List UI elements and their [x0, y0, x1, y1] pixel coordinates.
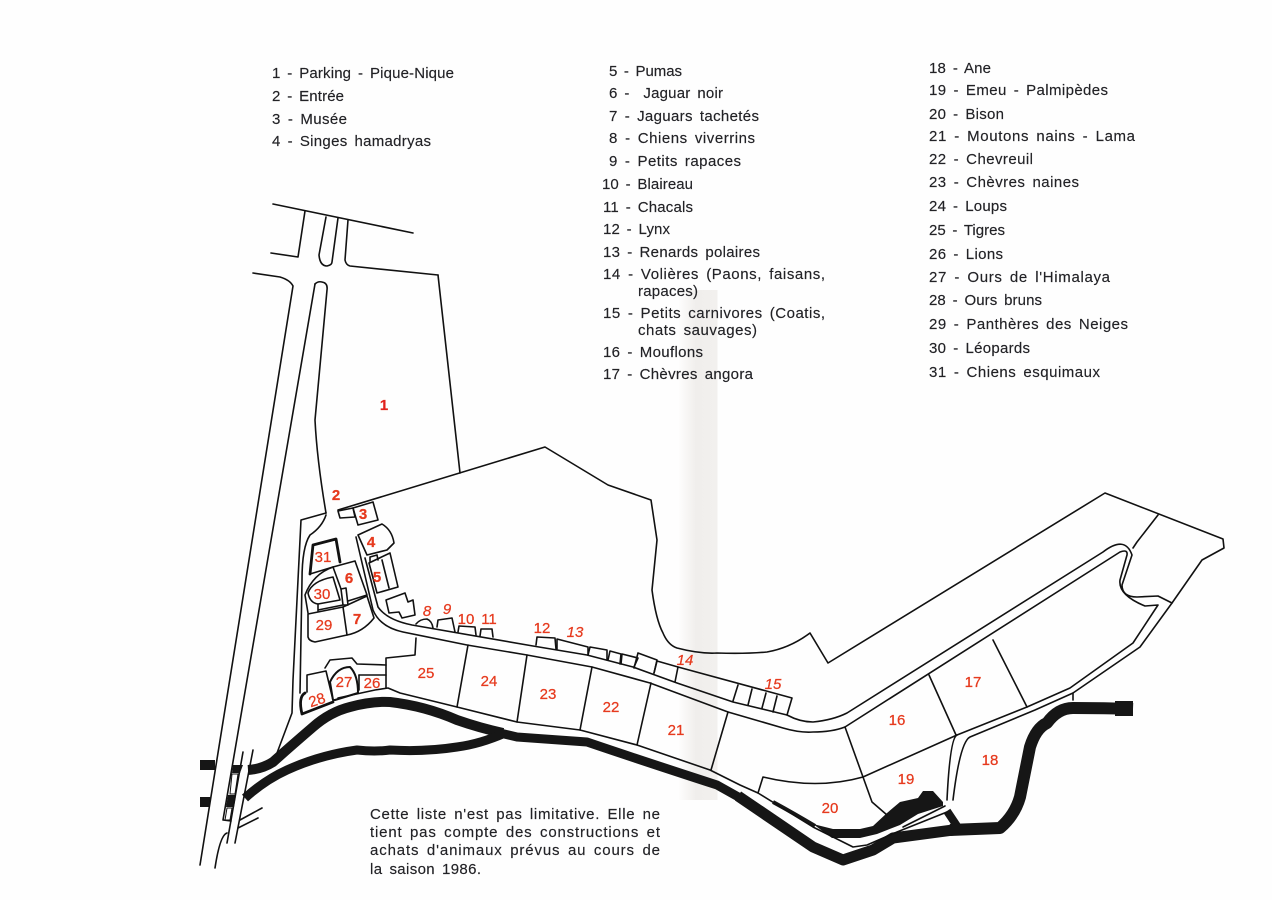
label 24: 24	[481, 673, 497, 690]
legend column: items 1 to 4	[272, 65, 454, 150]
note text block: la saison 1986.	[370, 861, 481, 878]
label 4: 4	[367, 534, 376, 551]
map number labels	[307, 397, 998, 817]
label 29: 29	[316, 617, 332, 634]
legend item 13: 13 - Renards polaires	[603, 244, 760, 261]
label 27: 27	[336, 674, 352, 691]
enclosure dividers	[386, 638, 1027, 815]
legend item 14: rapaces)	[638, 283, 698, 300]
legend item 26: 26 - Lions	[929, 246, 1003, 263]
legend column: items 18 to 31	[929, 60, 1136, 381]
label 20: 20	[822, 800, 838, 817]
label 25: 25	[418, 665, 434, 682]
legend item 14	[603, 266, 825, 300]
legend item 28: 28 - Ours bruns	[929, 292, 1042, 309]
legend item 3: 3 - Musée	[272, 111, 347, 128]
label 2: 2	[332, 487, 340, 504]
label 30: 30	[314, 586, 330, 603]
legend item 8: 8 - Chiens viverrins	[609, 130, 755, 147]
legend item 14: 14 - Volières (Paons, faisans,	[603, 266, 825, 283]
legend item 16: 16 - Mouflons	[603, 344, 703, 361]
map: site plan	[200, 204, 1224, 868]
legend item 23: 23 - Chèvres naines	[929, 174, 1079, 191]
buildings near the entrance	[338, 502, 415, 618]
legend item 9: 9 - Petits rapaces	[609, 153, 741, 170]
label 3: 3	[359, 506, 367, 523]
bear and lion enclosures 26, 27, 28	[301, 658, 386, 714]
legend item 12: 12 - Lynx	[603, 221, 670, 238]
legend column: items 5 to 17	[602, 63, 825, 383]
legend item 31: 31 - Chiens esquimaux	[929, 364, 1100, 381]
legend item 1: 1 - Parking - Pique-Nique	[272, 65, 454, 82]
label 6: 6	[345, 570, 353, 587]
label 9: 9	[443, 601, 452, 618]
label 14: 14	[677, 652, 693, 669]
legend item 4: 4 - Singes hamadryas	[272, 133, 431, 150]
label 26: 26	[364, 675, 380, 692]
note text block: achats d'animaux prévus au cours de	[370, 842, 660, 859]
legend item 2: 2 - Entrée	[272, 88, 344, 105]
label 18: 18	[982, 752, 998, 769]
label 7: 7	[353, 611, 361, 628]
label 28: 28	[307, 690, 328, 711]
legend item 6: 6 - Jaguar noir	[609, 85, 723, 102]
label 13: 13	[567, 624, 584, 641]
legend item 15	[603, 305, 825, 339]
legend item 17: 17 - Chèvres angora	[603, 366, 754, 383]
legend item 22: 22 - Chevreuil	[929, 151, 1033, 168]
label 10: 10	[458, 611, 474, 628]
small cages 8 to 15 along the road	[416, 618, 792, 715]
legend item 10: 10 - Blaireau	[602, 176, 693, 193]
label 5: 5	[373, 569, 381, 586]
label 8: 8	[423, 603, 432, 620]
label 23: 23	[540, 686, 556, 703]
label 21: 21	[668, 722, 684, 739]
riverside path lines	[338, 688, 947, 847]
park perimeter	[277, 275, 1224, 753]
legend item 29: 29 - Panthères des Neiges	[929, 316, 1128, 333]
legend item 5: 5 - Pumas	[609, 63, 682, 80]
label 31: 31	[315, 549, 331, 566]
legend item 7: 7 - Jaguars tachetés	[609, 108, 759, 125]
park roads	[356, 537, 1172, 800]
label 17: 17	[965, 674, 981, 691]
legend item 15: chats sauvages)	[638, 322, 757, 339]
legend item 20: 20 - Bison	[929, 106, 1004, 123]
legend item 15: 15 - Petits carnivores (Coatis,	[603, 305, 825, 322]
label 11: 11	[481, 611, 497, 628]
river: thick black watercourse	[200, 702, 1133, 860]
label 12: 12	[534, 620, 550, 637]
label 1: 1	[380, 397, 388, 414]
legend item 30: 30 - Léopards	[929, 340, 1030, 357]
legend item 18: 18 - Ane	[929, 60, 991, 77]
legend item 11: 11 - Chacals	[603, 199, 693, 216]
main highway and bridge	[200, 204, 438, 868]
legend item 27: 27 - Ours de l'Himalaya	[929, 269, 1111, 286]
label 16: 16	[889, 712, 905, 729]
label 15: 15	[765, 676, 782, 693]
legend item 24: 24 - Loups	[929, 198, 1007, 215]
legend item 25: 25 - Tigres	[929, 222, 1005, 239]
note text block: tient pas compte des constructions et	[370, 824, 661, 841]
note text block	[370, 806, 661, 878]
label 22: 22	[603, 699, 619, 716]
carnivore enclosures 6, 7, 29, 30, 31	[305, 539, 374, 642]
legend item 19: 19 - Emeu - Palmipèdes	[929, 82, 1108, 99]
small bridge openings over the river	[225, 774, 238, 820]
note text block: Cette liste n'est pas limitative. Elle ne	[370, 806, 660, 823]
label 19: 19	[898, 771, 914, 788]
legend item 21: 21 - Moutons nains - Lama	[929, 128, 1136, 145]
